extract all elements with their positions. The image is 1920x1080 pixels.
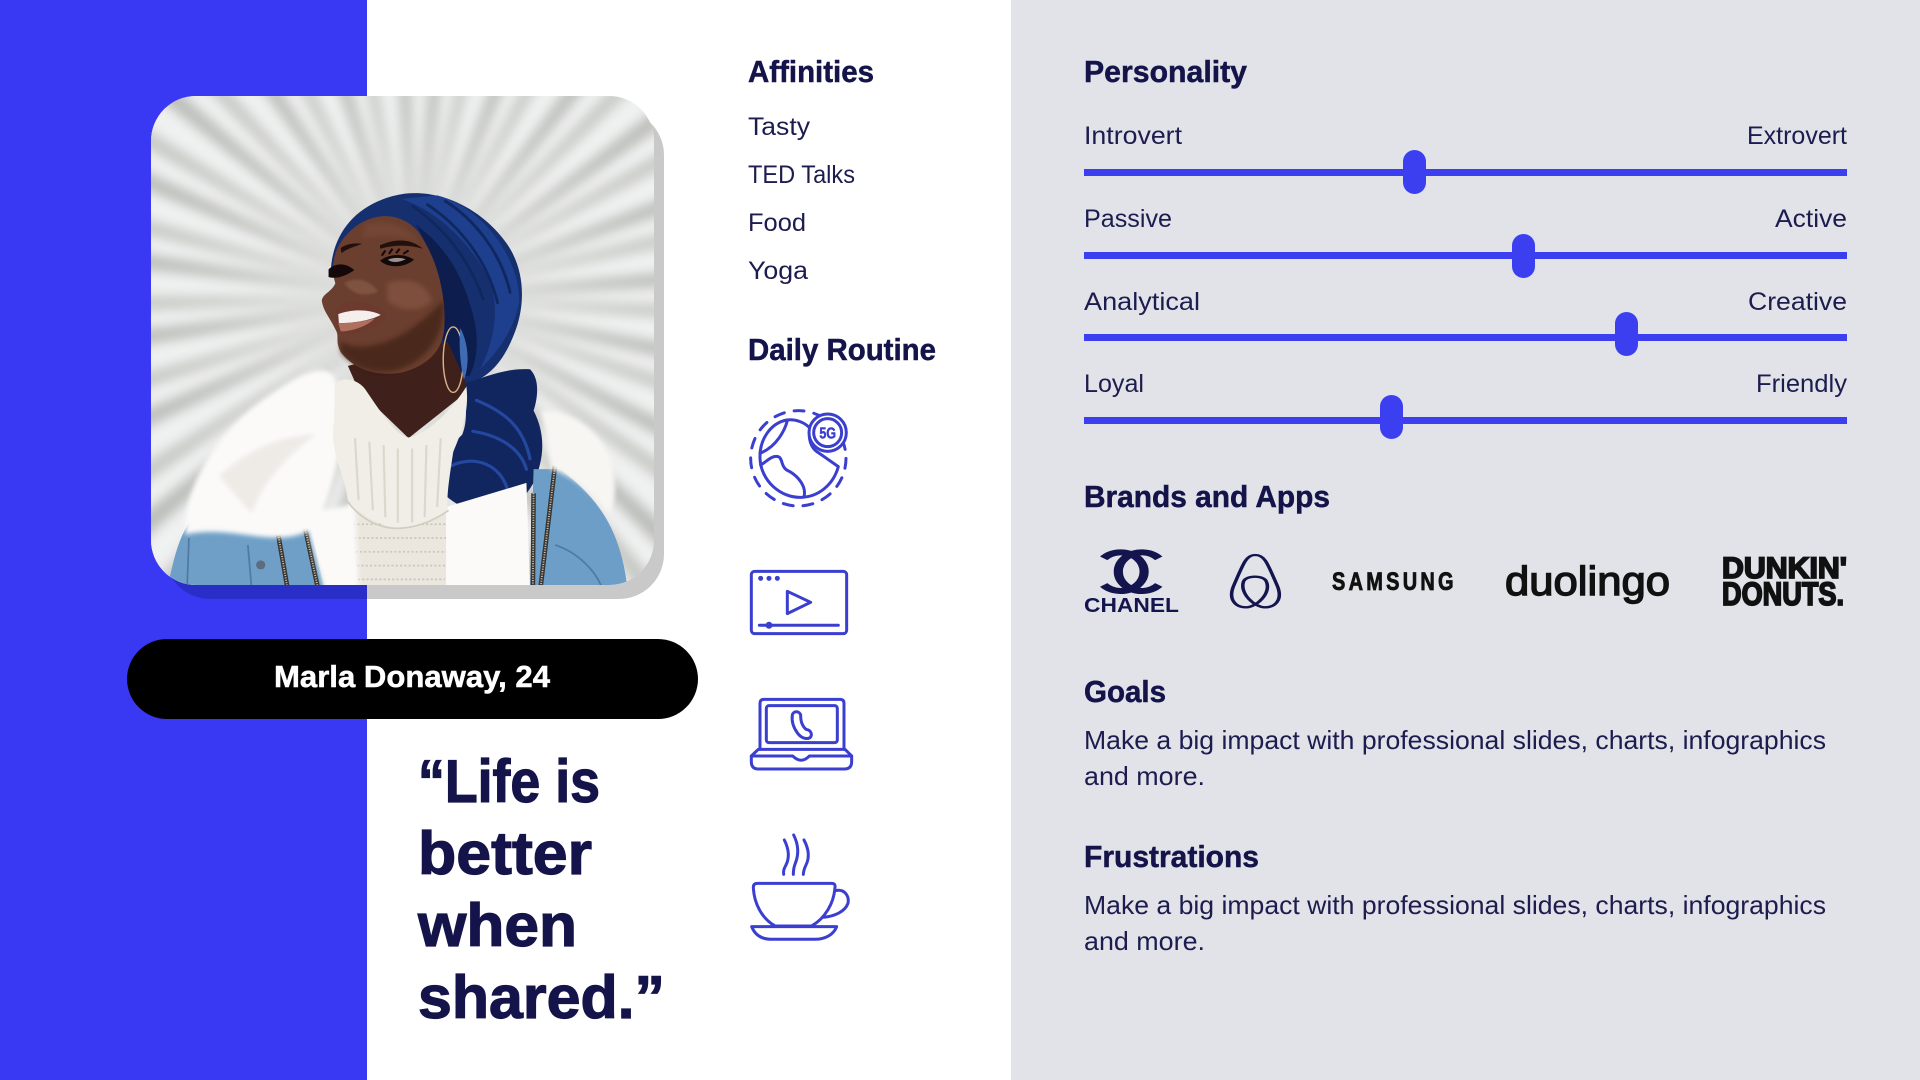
section: personality [1084,54,1848,439]
lower sweater [347,504,449,590]
icon: steaming coffee cup [752,835,848,939]
logo: samsung: SAMSUNG [1332,568,1454,596]
turtleneck [333,379,467,529]
face [321,216,444,374]
quote [417,748,665,1031]
section: affinities [748,54,874,285]
section: brands and apps [1084,479,1847,617]
ponytail [433,369,542,566]
hair back [330,193,522,383]
slider: passive to active [1084,205,1847,278]
heading: daily routine: Daily Routine [748,332,936,367]
slider: introvert to extrovert: Extrovert [1747,122,1847,150]
goals text: and more. [1084,761,1205,791]
slider: analytical to creative: Creative [1748,288,1847,316]
quote: “Life is [418,748,600,815]
logo: dunkin donuts: DUNKIN' [1722,552,1847,585]
neck [347,342,469,438]
earring [443,327,463,392]
slider: loyal to friendly: Friendly [1756,370,1848,398]
panel: grey right background [1011,0,1920,1080]
zippers [278,466,555,586]
section: daily routine [748,332,936,939]
icon: globe with 5G badge [751,411,846,506]
goals text: Make a big impact with professional slides, charts, infographics [1084,725,1826,755]
affinities list: Yoga [748,257,808,285]
logo: chanel [1084,552,1179,617]
quote: when [417,892,577,959]
icon: laptop with phone call [751,699,852,769]
logo: dunkin donuts: DONUTS. [1722,576,1844,612]
brows and eyes [380,240,422,249]
frustrations text: and more. [1084,926,1205,956]
slider: passive to active: Active [1775,205,1847,233]
heading: affinities: Affinities [748,54,874,89]
heading: personality: Personality [1084,54,1248,89]
heading: brands and apps: Brands and Apps [1084,479,1330,514]
logo: airbnb [1232,555,1279,607]
fur left [185,371,358,590]
icon: globe with 5G badge: 5G [819,426,836,443]
affinities list: TED Talks [748,161,855,189]
slider: loyal to friendly: Loyal [1084,370,1144,398]
denim jacket right [530,469,627,590]
affinities list [748,113,855,285]
photo: portrait of smiling woman with blue hair [151,96,654,585]
fur right [446,483,530,590]
logo: duolingo: duolingo [1505,558,1670,604]
panel: blue sidebar [0,0,367,1080]
photo offset shadow [165,110,664,599]
slider: analytical to creative [1084,288,1847,356]
quote: shared.” [418,964,665,1031]
name pill [127,639,698,719]
heading: goals: Goals [1084,674,1166,709]
section: goals [1084,674,1826,791]
frustrations text: Make a big impact with professional slides, charts, infographics [1084,890,1826,920]
affinities list: Food [748,209,806,237]
section: frustrations [1084,839,1826,956]
logo: chanel: CHANEL [1084,595,1179,617]
name label: Marla Donaway, 24 [274,659,551,694]
frustrations text [1084,890,1826,956]
slider: analytical to creative: Analytical [1084,288,1200,316]
heading: frustrations: Frustrations [1084,839,1259,874]
quote: better [418,820,592,887]
slider: introvert to extrovert [1084,122,1847,194]
slider: introvert to extrovert: Introvert [1084,122,1182,150]
mouth [335,302,387,334]
affinities list: Tasty [748,113,811,141]
logo: dunkin donuts [1722,552,1847,612]
slider: loyal to friendly [1084,370,1848,439]
denim jacket left [165,517,324,590]
icon: video player [751,571,847,634]
slider: passive to active: Passive [1084,205,1172,233]
goals text [1084,725,1826,791]
